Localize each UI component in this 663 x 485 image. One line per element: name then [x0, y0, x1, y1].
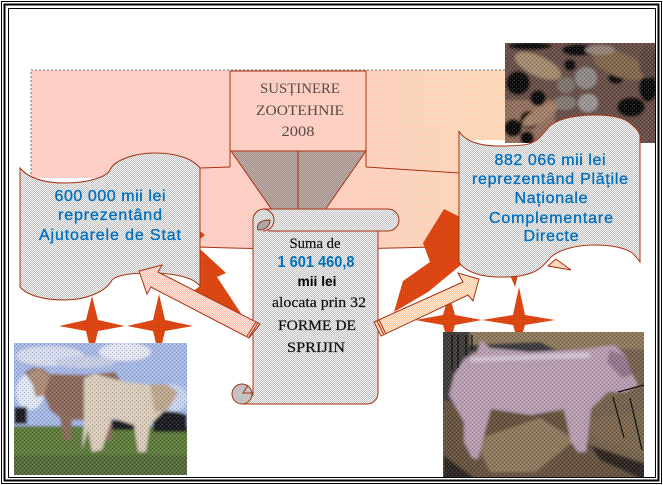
scroll top curl — [258, 209, 378, 231]
panel: title box — [230, 71, 366, 167]
panel: central scroll — [232, 209, 399, 404]
left callout text: Ajutoarele de Stat — [39, 227, 182, 244]
right callout text — [472, 152, 628, 245]
panel: right wave callout — [459, 115, 640, 277]
title: ZOOTEHNIE — [256, 103, 344, 119]
icon: left lightning bolt — [192, 249, 242, 315]
left callout text: 600 000 mii lei — [54, 188, 166, 205]
panel: pink background area — [31, 70, 510, 249]
icon: right lightning bolt — [394, 209, 462, 312]
panel: pig photo — [443, 332, 644, 477]
right callout text: 882 066 mii lei — [494, 152, 606, 169]
panel: cow photo — [14, 343, 187, 475]
scroll text: alocata prin 32 — [272, 295, 366, 311]
title: 2008 — [282, 124, 314, 140]
funnel connector — [231, 151, 366, 210]
right callout text: reprezentând Plățile — [472, 171, 628, 188]
scroll text: FORME DE — [278, 318, 356, 334]
title: SUSȚINERE — [260, 81, 340, 97]
right callout text: Naționale — [514, 190, 588, 207]
icon: four point stars left — [59, 294, 193, 356]
small pink tab — [548, 259, 571, 270]
scroll bottom curl — [232, 384, 253, 404]
arrow: to national payments — [374, 273, 479, 336]
panel: left wave callout — [20, 153, 200, 300]
title — [256, 81, 344, 140]
scroll text — [272, 236, 366, 356]
scroll text: Suma de — [290, 236, 341, 252]
icon: four point stars right — [415, 275, 555, 345]
icon: small orange marker — [200, 231, 205, 239]
left callout text — [39, 188, 182, 244]
right callout text: Directe — [524, 228, 579, 245]
right callout text: Complementare — [489, 210, 613, 227]
scroll text: mii lei — [298, 273, 336, 289]
panel: bee photo — [505, 43, 655, 143]
left callout text: reprezentând — [58, 207, 162, 224]
scroll text: 1 601 460,8 — [278, 254, 355, 271]
arrow: to state aid — [139, 265, 260, 338]
scroll text: SPRIJIN — [287, 340, 345, 356]
